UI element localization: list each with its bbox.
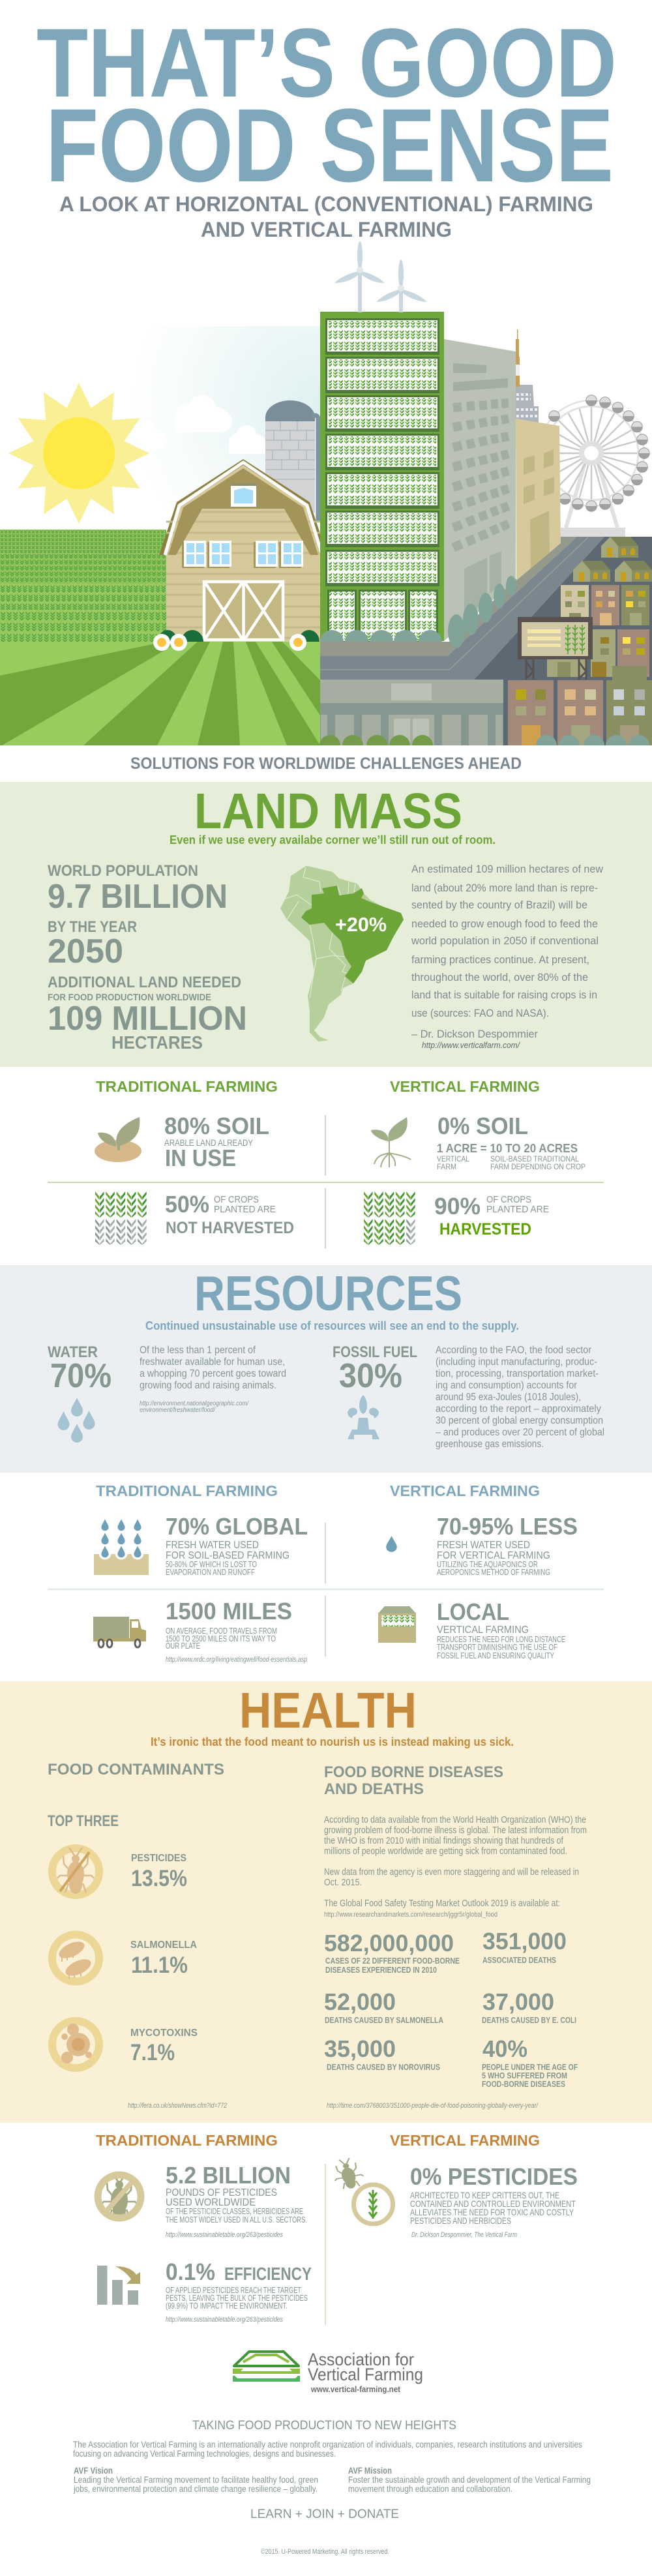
- text: mission: AVF Mission: [348, 2466, 392, 2476]
- stat: 80% soil: [164, 1113, 269, 1171]
- stat: 70% global: EVAPORATION AND RUNOFF: [166, 1568, 255, 1577]
- logo: association for vertical farming: Vertical Farming: [308, 2365, 423, 2384]
- stats: disease numbers: 52,000: [324, 1988, 396, 2015]
- stat: 0% soil: [437, 1113, 585, 1171]
- heading: vertical: VERTICAL FARMING: [390, 2132, 540, 2149]
- stat: 70% global: FRESH WATER USED: [166, 1540, 259, 1551]
- stat: local: FOSSIL FUEL AND ENSURING QUALITY: [437, 1651, 555, 1660]
- stat: pesticides: [131, 1853, 187, 1891]
- stat: 5.2 billion: USED WORLDWIDE: [166, 2197, 256, 2208]
- text: water paragraph: http://environment.nationalgeographic.com/: [140, 1400, 249, 1407]
- stat: 70% global: FOR SOIL-BASED FARMING: [166, 1550, 289, 1561]
- stat: 70-95% less: 70-95% LESS: [437, 1513, 578, 1540]
- icon: sun: [8, 383, 149, 524]
- houses: [573, 537, 652, 582]
- text: fossil paragraph: tion, processing, transportation market-: [436, 1368, 599, 1379]
- icon: silo: [265, 400, 318, 522]
- icon: single drop: [386, 1536, 397, 1552]
- text: mission: Foster the sustainable growth and development of the Vertical Farming: [348, 2475, 591, 2485]
- text: water paragraph: Of the less than 1 percent of: [140, 1345, 256, 1356]
- icon: barn: [153, 459, 327, 651]
- stat: mycotoxins: MYCOTOXINS: [130, 2028, 198, 2039]
- stats left: WORLD POPULATION: [48, 862, 198, 880]
- tower building: [444, 339, 516, 648]
- icon: oil fountain: [348, 1395, 379, 1439]
- stat: 1500 miles: OUR PLATE: [166, 1641, 200, 1651]
- stat: 0% soil: SOIL-BASED TRADITIONAL: [490, 1156, 580, 1163]
- heading: vertical: VERTICAL FARMING: [390, 1482, 540, 1499]
- stat: salmonella: SALMONELLA: [130, 1939, 197, 1951]
- stat: 1500 miles: [166, 1598, 307, 1664]
- text: diseases paragraph: millions of people worldwide are getting sick from contaminated food.: [324, 1846, 567, 1857]
- stats: disease numbers: 351,000: [482, 1928, 567, 1954]
- logo: association for vertical farming: www.vertical-farming.net: [310, 2384, 401, 2394]
- road and ground right: [320, 537, 652, 680]
- text: land paragraph: land (about 20% more land than is repre-: [411, 882, 598, 894]
- text: land paragraph: needed to grow enough food to feed the: [411, 918, 598, 930]
- icon: plant with roots: [371, 1117, 411, 1167]
- vertical farm building: [320, 312, 444, 642]
- stat: 50 percent: 50%: [165, 1191, 209, 1218]
- map: south america: +20%: [335, 913, 387, 936]
- stat: local: VERTICAL FARMING: [437, 1625, 529, 1636]
- yellow building: [516, 419, 561, 580]
- text: land paragraph: throughout the world, over 80% of the: [411, 971, 588, 983]
- lower building: [319, 680, 503, 745]
- heading: contaminants: FOOD CONTAMINANTS: [48, 1761, 224, 1778]
- heading: traditional: TRADITIONAL FARMING: [96, 1078, 278, 1095]
- stat: pesticides: PESTICIDES: [131, 1853, 186, 1864]
- stats left: 2050: [48, 933, 123, 970]
- stat: efficiency: EFFICIENCY: [224, 2264, 312, 2284]
- stats: disease numbers: PEOPLE UNDER THE AGE OF: [482, 2062, 578, 2072]
- barn loft window: [231, 483, 256, 508]
- stat: 0% soil: FARM: [437, 1163, 456, 1171]
- stat: 0% soil: VERTICAL: [437, 1156, 470, 1163]
- stat: mycotoxins: 7.1%: [130, 2040, 175, 2065]
- stats: disease numbers: [324, 1928, 578, 2089]
- icon: shielded crop: [330, 2157, 393, 2224]
- stats: disease numbers: 5 WHO SUFFERED FROM: [482, 2071, 567, 2080]
- stat: water: 70%: [50, 1357, 111, 1395]
- stat: 1500 miles: http://www.nrdc.org/living/eatingwell/food-essentials.asp: [166, 1656, 307, 1664]
- text: land paragraph: [411, 863, 604, 1050]
- stat: 5.2 billion: http://www.sustainabletable.org/263/pesticides: [166, 2231, 283, 2239]
- stats: disease numbers: DEATHS CAUSED BY E. COLI: [482, 2015, 576, 2025]
- stats: disease numbers: CASES OF 22 DIFFERENT FOOD-BORNE: [325, 1956, 460, 1966]
- stat: 5.2 billion: OF THE PESTICIDE CLASSES, HERBICIDES ARE: [166, 2207, 303, 2216]
- panel: health: [0, 1681, 652, 2123]
- panel: health comparison: [96, 2132, 578, 2325]
- stats: disease numbers: ASSOCIATED DEATHS: [482, 1955, 556, 1965]
- stats left: FOR FOOD PRODUCTION WORLDWIDE: [48, 993, 211, 1003]
- text: land paragraph: http://www.verticalfarm.com/: [422, 1040, 520, 1050]
- icon: rain on soil: [94, 1519, 149, 1575]
- heading: solutions: SOLUTIONS FOR WORLDWIDE CHALLENGES AHEAD: [130, 755, 522, 773]
- logo: association for vertical farming: [233, 2350, 423, 2394]
- text: vision: jobs, environmental protection and climate change resilience – globally.: [73, 2484, 318, 2494]
- text: diseases paragraph: http://www.researchandmarkets.com/research/jggr5r/global_food: [324, 1911, 497, 1919]
- stat: 80% soil: 80% SOIL: [164, 1113, 269, 1139]
- heading: diseases: FOOD BORNE DISEASES: [324, 1763, 503, 1781]
- stat: 0% pesticides: Dr. Dickson Despommier, The Vertical Farm: [411, 2231, 517, 2239]
- panel: land comparison: [48, 1078, 604, 1249]
- stat: 90 percent: 90%: [434, 1193, 481, 1220]
- stat: 50 percent: [165, 1191, 294, 1237]
- text: diseases paragraph: [324, 1815, 587, 1919]
- stat: efficiency: (99.9%) TO IMPACT THE ENVIRONMENT.: [166, 2301, 288, 2311]
- text: fossil paragraph: 30 percent of global energy consumption: [436, 1415, 603, 1426]
- stat: 0% pesticides: PESTICIDES AND HERBICIDES: [410, 2215, 511, 2226]
- stat: 70% global: 50-80% OF WHICH IS LOST TO: [166, 1560, 257, 1569]
- stat: 50 percent: OF CROPS: [214, 1194, 259, 1205]
- bushes: [158, 630, 319, 642]
- heading: health: HEALTH: [239, 1683, 417, 1739]
- text: vision: AVF Vision: [74, 2466, 113, 2476]
- text: land paragraph: sented by the country of Brazil) will be: [411, 899, 587, 911]
- text: water paragraph: [140, 1345, 286, 1414]
- text: land paragraph: world population in 2050 if conventional: [411, 935, 599, 947]
- text: fossil paragraph: around 95 exa-Joules (1018 Joules),: [436, 1392, 581, 1403]
- stat: 70% global: [166, 1513, 308, 1577]
- stats left: ADDITIONAL LAND NEEDED: [48, 974, 241, 991]
- stat: 0% pesticides: ALLEVIATES THE NEED FOR TOXIC AND COSTLY: [410, 2207, 574, 2217]
- stat: water: [48, 1343, 111, 1395]
- stat: salmonella: [130, 1939, 197, 1978]
- panel: resources: [0, 1265, 652, 1473]
- stat: 70-95% less: [437, 1513, 578, 1577]
- stat: 90 percent: [434, 1193, 549, 1238]
- ground stripes: [0, 642, 320, 745]
- stat: 70% global: 70% GLOBAL: [166, 1513, 308, 1540]
- stat: salmonella: 11.1%: [131, 1953, 188, 1978]
- heading: traditional: TRADITIONAL FARMING: [96, 1482, 278, 1499]
- stats left: BY THE YEAR: [48, 918, 137, 936]
- copyright: ©2015. U-Powered Marketing. All rights reserved.: [261, 2548, 389, 2556]
- panel: land mass: [0, 782, 652, 1067]
- call to action: LEARN + JOIN + DONATE: [250, 2508, 399, 2521]
- stats left: 9.7 BILLION: [48, 878, 228, 916]
- icon: wind turbines: [334, 241, 427, 312]
- text: diseases paragraph: growing problem of food-borne illness is global. The latest information from: [324, 1825, 587, 1836]
- stats: disease numbers: 40%: [482, 2035, 527, 2062]
- logo: association for vertical farming: Association for: [308, 2350, 414, 2369]
- text: water paragraph: a whopping 70 percent goes toward: [140, 1368, 286, 1379]
- stat: local: LOCAL: [437, 1598, 509, 1625]
- barn door: [203, 580, 284, 641]
- text: fossil paragraph: According to the FAO, the food sector: [436, 1345, 591, 1356]
- heading: land mass: LAND MASS: [194, 783, 462, 839]
- icon: daisies: [153, 634, 306, 651]
- subheading: Continued unsustainable use of resources will see an end to the supply.: [145, 1319, 519, 1332]
- text: vision: [73, 2466, 318, 2494]
- icon: plant in soil: [95, 1117, 141, 1162]
- text: fossil paragraph: according to the report – approximately: [436, 1403, 601, 1415]
- text: mission: movement through education and collaboration.: [348, 2484, 512, 2494]
- text: land paragraph: – Dr. Dickson Despommier: [411, 1028, 538, 1040]
- stat: fossil fuel: [333, 1343, 417, 1395]
- map: south america: [280, 866, 404, 1041]
- text: diseases paragraph: The Global Food Safety Testing Market Outlook 2019 is available at:: [324, 1898, 560, 1909]
- stat: 0% soil: 1 ACRE = 10 TO 20 ACRES: [437, 1142, 578, 1155]
- front street buildings: [503, 666, 652, 745]
- icon: truck: [93, 1617, 146, 1647]
- title: [37, 8, 617, 203]
- stat: 1500 miles: 1500 MILES: [166, 1598, 292, 1625]
- text: fossil paragraph: greenhouse gas emissions.: [436, 1439, 544, 1450]
- text: mission: [348, 2466, 591, 2494]
- stat: 70-95% less: UTILIZING THE AQUAPONICS OR: [437, 1560, 538, 1569]
- background tower: [516, 329, 539, 423]
- stat: local: [437, 1598, 565, 1660]
- text: fossil paragraph: [436, 1345, 604, 1450]
- text: fossil paragraph: (including input manufacturing, produc-: [436, 1356, 597, 1368]
- icon: falling bar chart: [97, 2266, 140, 2305]
- stat: 50 percent: PLANTED ARE: [214, 1204, 276, 1215]
- panel: hero illustration: [0, 241, 652, 745]
- stat: 5.2 billion: THE MOST WIDELY USED IN ALL U.S. SECTORS.: [166, 2215, 307, 2224]
- icon: local farm building: [378, 1606, 416, 1643]
- text: land paragraph: land that is suitable for raising crops is in: [411, 989, 597, 1001]
- text: diseases paragraph: Oct. 2015.: [324, 1878, 362, 1888]
- text: diseases paragraph: According to data available from the World Health Organization (WHO) the: [324, 1815, 586, 1825]
- stat: pesticides: 13.5%: [131, 1866, 187, 1891]
- stats left: HECTARES: [111, 1032, 203, 1053]
- text: land paragraph: An estimated 109 million hectares of new: [411, 863, 604, 875]
- stat: fossil fuel: 30%: [339, 1357, 402, 1395]
- stat: 1500 miles: ON AVERAGE, FOOD TRAVELS FROM: [166, 1626, 277, 1636]
- stat: water: WATER: [48, 1343, 98, 1361]
- heading: traditional: TRADITIONAL FARMING: [96, 2132, 278, 2149]
- stats: disease numbers: 582,000,000: [324, 1930, 454, 1956]
- stat: 70-95% less: AEROPONICS METHOD OF FARMING: [437, 1568, 550, 1577]
- stat: 80% soil: ARABLE LAND ALREADY: [164, 1137, 254, 1148]
- subheading: It’s ironic that the food meant to nourish us is instead making us sick.: [151, 1735, 514, 1748]
- stats left: 109 MILLION: [48, 1000, 247, 1038]
- stat: efficiency: OF APPLIED PESTICIDES REACH THE TARGET: [166, 2286, 301, 2295]
- text: fossil paragraph: ing and consumption) accounts for: [436, 1380, 577, 1391]
- icon: ferris wheel: [539, 395, 649, 537]
- stat: 5.2 billion: POUNDS OF PESTICIDES: [166, 2187, 277, 2198]
- icon: clouds: [125, 395, 266, 454]
- text: water paragraph: environment/freshwater/food/: [140, 1407, 216, 1414]
- subtitle: AND VERTICAL FARMING: [201, 218, 452, 241]
- stat: fossil fuel: FOSSIL FUEL: [333, 1343, 417, 1361]
- heading: diseases: AND DEATHS: [324, 1780, 424, 1798]
- icon: salmonella: [52, 1934, 99, 1981]
- barn windows: [182, 541, 303, 568]
- stats left: [48, 862, 247, 1053]
- stats: disease numbers: DISEASES EXPERIENCED IN 2010: [325, 1965, 437, 1975]
- icon: no pesticide: [98, 2174, 141, 2220]
- stats: disease numbers: DEATHS CAUSED BY NOROVIRUS: [327, 2062, 440, 2072]
- stat: 70-95% less: FRESH WATER USED: [437, 1540, 530, 1551]
- stat: 0% pesticides: ARCHITECTED TO KEEP CRITTERS OUT, THE: [410, 2190, 559, 2200]
- text: about: [73, 2440, 582, 2459]
- stat: local: REDUCES THE NEED FOR LONG DISTANCE: [437, 1635, 565, 1644]
- stat: efficiency: http://www.sustainabletable.org/263/pesticides: [166, 2316, 283, 2324]
- text: diseases paragraph: New data from the agency is even more staggering and will be released in: [324, 1867, 579, 1878]
- stat: efficiency: PESTS, LEAVING THE BULK OF THE PESTICIDES: [166, 2294, 308, 2303]
- stat: mycotoxins: [130, 2028, 198, 2065]
- stat: 0% soil: FARM DEPENDING ON CROP: [490, 1163, 585, 1171]
- apartment row two: [547, 629, 649, 677]
- stat: 90 percent: OF CROPS: [486, 1194, 531, 1205]
- text: water paragraph: freshwater available for human use,: [140, 1356, 285, 1368]
- heading: vertical: VERTICAL FARMING: [390, 1078, 540, 1095]
- stat: efficiency: [166, 2258, 312, 2324]
- text: about: The Association for Vertical Farming is an internationally active nonprofit organization of individuals, companies, research institutions and universities: [73, 2440, 582, 2449]
- text: land paragraph: farming practices continue. At present,: [411, 953, 589, 966]
- subtitle: A LOOK AT HORIZONTAL (CONVENTIONAL) FARMING: [59, 192, 593, 216]
- stat: local: TRANSPORT DIMINISHING THE USE OF: [437, 1643, 557, 1652]
- icon: mycotoxins: [52, 2021, 99, 2068]
- stat: 0% pesticides: 0% PESTICIDES: [410, 2163, 578, 2190]
- stat: 0% soil: 0% SOIL: [437, 1113, 528, 1139]
- source: http://fera.co.uk/showNews.cfm?id=772: [128, 2102, 227, 2110]
- heading: diseases: [324, 1763, 503, 1798]
- icon: billboard: [518, 617, 593, 680]
- stats: disease numbers: DEATHS CAUSED BY SALMONELLA: [325, 2015, 443, 2025]
- stat: 70-95% less: FOR VERTICAL FARMING: [437, 1550, 550, 1561]
- subheading: Even if we use every availabe corner we’ll still run out of room.: [170, 833, 496, 846]
- source: http://time.com/3768003/351000-people-die-of-food-poisoning-globally-every-year/: [327, 2102, 539, 2110]
- stats: disease numbers: FOOD-BORNE DISEASES: [482, 2079, 565, 2089]
- text: about: focusing on advancing Vertical Farming technologies, designs and businesses.: [73, 2449, 336, 2459]
- text: water paragraph: growing food and raising animals.: [140, 1380, 276, 1391]
- stat: 1500 miles: 1500 TO 2500 MILES ON ITS WAY TO: [166, 1634, 276, 1643]
- stats: disease numbers: 35,000: [324, 2035, 396, 2062]
- heading: top three: TOP THREE: [48, 1812, 119, 1830]
- stat: 0% pesticides: CONTAINED AND CONTROLLED ENVIRONMENT: [410, 2198, 576, 2209]
- text: fossil paragraph: – and produces over 20 percent of global: [436, 1427, 604, 1438]
- panel: about avf: [73, 2419, 591, 2556]
- crop field: [0, 530, 166, 642]
- icon: wheat 90 percent: [364, 1191, 415, 1245]
- stat: efficiency: 0.1%: [166, 2258, 215, 2285]
- sky: [0, 326, 320, 535]
- stat: 90 percent: PLANTED ARE: [486, 1204, 549, 1215]
- icon: wheat 50 percent: [95, 1191, 147, 1245]
- text: land paragraph: use (sources: FAO and NASA).: [411, 1007, 549, 1019]
- apartment row: [561, 585, 649, 625]
- subtitle: [59, 192, 593, 241]
- stat: 80% soil: IN USE: [165, 1145, 236, 1171]
- icon: pesticides: [52, 1848, 99, 1895]
- text: vision: Leading the Vertical Farming movement to facilitate healthy food, green: [74, 2475, 318, 2485]
- heading: new heights: TAKING FOOD PRODUCTION TO NEW HEIGHTS: [192, 2419, 456, 2433]
- stat: 5.2 billion: 5.2 BILLION: [166, 2162, 291, 2189]
- text: diseases paragraph: the WHO is from 2010 with initial findings showing that hundreds of: [324, 1836, 564, 1846]
- panel: resources comparison: [48, 1482, 604, 1664]
- stat: 90 percent: HARVESTED: [439, 1220, 531, 1238]
- stat: 50 percent: NOT HARVESTED: [166, 1219, 294, 1237]
- icon: water drops: [57, 1398, 95, 1443]
- stat: 0% pesticides: [410, 2163, 578, 2239]
- stats: disease numbers: 37,000: [482, 1988, 554, 2015]
- heading: resources: RESOURCES: [194, 1266, 462, 1321]
- stat: 5.2 billion: [166, 2162, 307, 2239]
